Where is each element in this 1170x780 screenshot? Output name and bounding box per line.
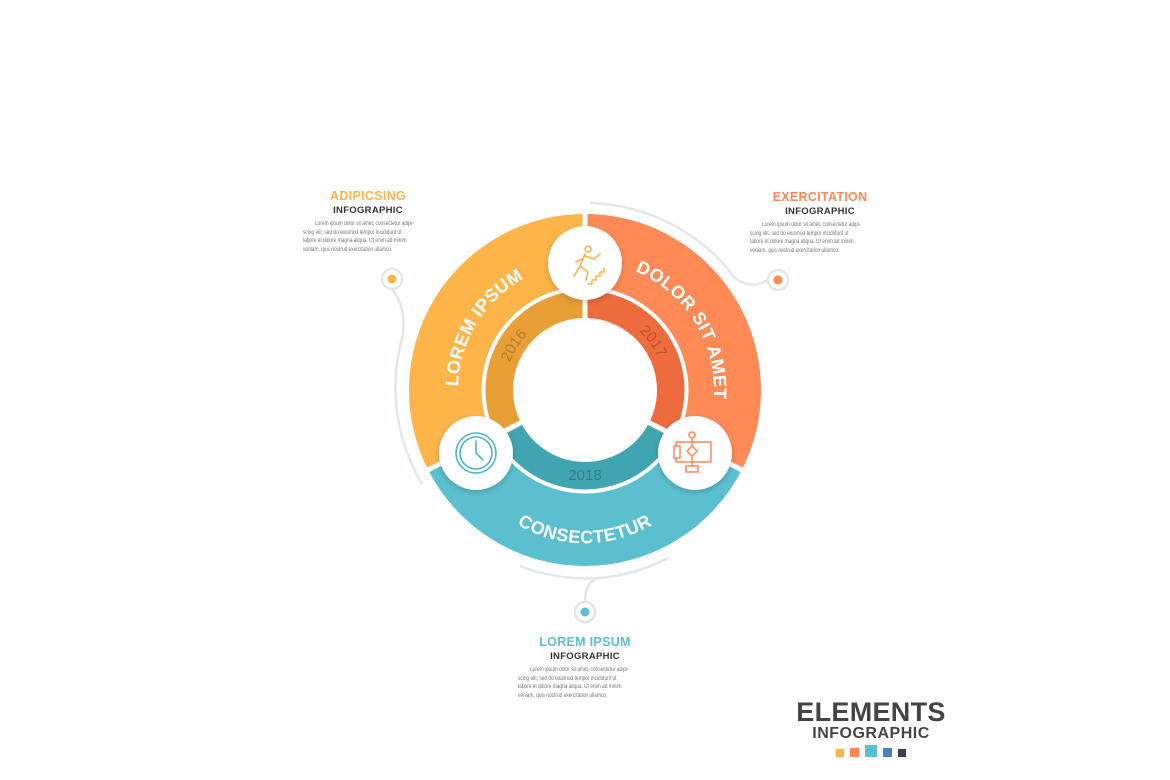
text: scing elit, sed do eiusmod tempor incididunt ut bbox=[750, 231, 848, 237]
icon: flowchart bbox=[658, 416, 732, 490]
text: INFOGRAPHIC bbox=[333, 205, 403, 216]
logo: elements infographic: ELEMENTS bbox=[796, 697, 946, 727]
text: INFOGRAPHIC bbox=[785, 206, 855, 217]
text: INFOGRAPHIC bbox=[550, 651, 620, 662]
text: Lorem ipsum dolor sit amet, consectetur adipi- bbox=[762, 222, 860, 228]
text: LOREM IPSUM bbox=[539, 635, 631, 649]
icon: clock bbox=[439, 416, 513, 490]
inner year band bbox=[499, 304, 671, 476]
year labels: 2016 bbox=[501, 329, 526, 362]
text: Lorem ipsum dolor sit amet, consectetur adipi- bbox=[315, 221, 413, 227]
text block: adipicsing bbox=[303, 189, 414, 253]
text: Lorem ipsum dolor sit amet, consectetur adipi- bbox=[530, 667, 628, 673]
year labels: 2017 bbox=[640, 326, 668, 354]
segment labels bbox=[446, 260, 726, 544]
text block: exercitation bbox=[750, 190, 867, 254]
dot markers bbox=[382, 269, 788, 622]
text block: lorem ipsum bbox=[518, 635, 631, 699]
text: scing elit, sed do eiusmod tempor incididunt ut bbox=[303, 230, 401, 236]
logo: elements infographic bbox=[796, 697, 946, 757]
connector lines bbox=[392, 203, 768, 602]
year labels bbox=[501, 326, 668, 484]
segment labels: CONSECTETUR bbox=[520, 516, 652, 544]
segment labels: LOREM IPSUM bbox=[446, 268, 523, 386]
text: labore et dolore magna aliqua. Ut enim ad minim bbox=[750, 239, 854, 245]
text: veniam, quis nostrud exercitation ullamco. bbox=[303, 247, 392, 253]
text: labore et dolore magna aliqua. Ut enim ad minim bbox=[303, 238, 407, 244]
text: EXERCITATION bbox=[773, 190, 867, 204]
text: veniam, quis nostrud exercitation ullamco. bbox=[518, 693, 607, 699]
logo: elements infographic: INFOGRAPHIC bbox=[812, 725, 930, 742]
year labels: 2018 bbox=[568, 467, 602, 484]
text: labore et dolore magna aliqua. Ut enim ad minim bbox=[518, 684, 622, 690]
icon: runner on stairs bbox=[548, 226, 622, 300]
text: scing elit, sed do eiusmod tempor incididunt ut bbox=[518, 676, 616, 682]
outer ring segments bbox=[446, 250, 724, 529]
segment labels: DOLOR SIT AMET bbox=[636, 260, 726, 399]
text: ADIPICSING bbox=[330, 189, 406, 203]
text: veniam, quis nostrud exercitation ullamco. bbox=[750, 248, 839, 254]
